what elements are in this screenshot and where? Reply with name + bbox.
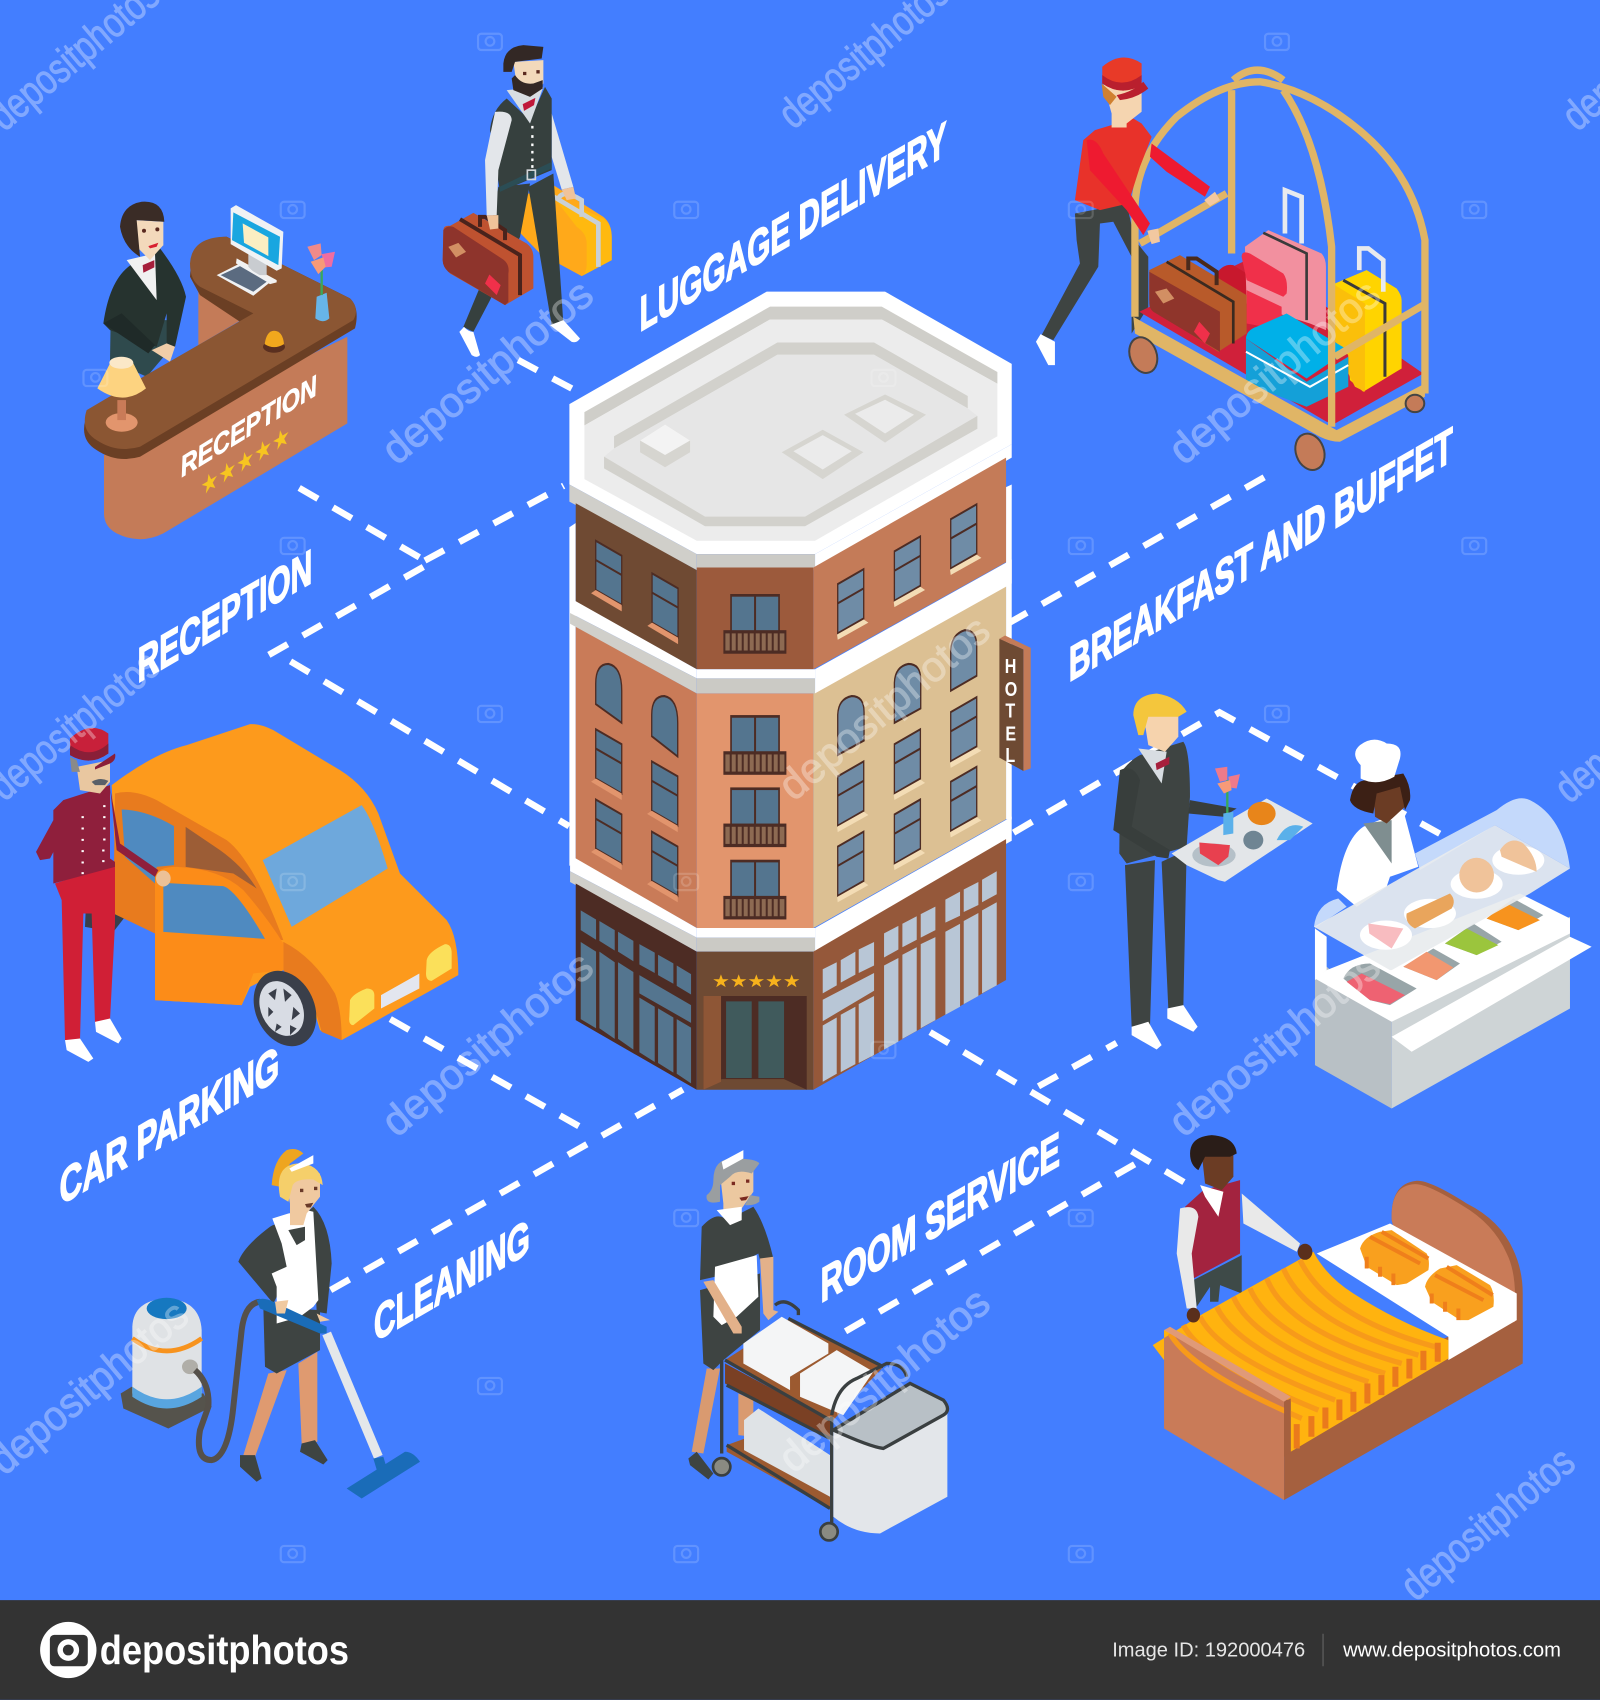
chef shirt [1363, 820, 1392, 863]
chef body [1337, 810, 1418, 907]
hotel sign: E [1005, 722, 1016, 745]
arms [703, 1257, 778, 1333]
trousers [1193, 1255, 1242, 1307]
bed foot board edge [1164, 1327, 1291, 1402]
mattress [1317, 1223, 1517, 1360]
image id: Image ID: 192000476 [1112, 1639, 1305, 1662]
cake [1199, 842, 1230, 865]
hair [1102, 83, 1117, 105]
vacuum grip [257, 1299, 327, 1333]
rear wheel [85, 883, 125, 932]
cornice bands [570, 559, 1012, 952]
footer bar [0, 1600, 1600, 1700]
label: breakfast and buffet: BREAKFAST AND BUFFET [1069, 417, 1453, 693]
chef hair [1350, 773, 1410, 813]
door glass [163, 883, 265, 939]
desk sign text: RECEPTION [179, 369, 319, 483]
computer [217, 205, 283, 296]
tray [1172, 798, 1313, 882]
head [1202, 1150, 1233, 1190]
roof [569, 292, 1012, 570]
footer logo text: depositphotos [100, 1627, 349, 1673]
vacuum blue rim [132, 1387, 202, 1408]
desk [198, 292, 247, 345]
buttons [83, 805, 104, 874]
wheels [1124, 333, 1424, 474]
hair and beard [503, 45, 543, 97]
waiter head [1143, 713, 1178, 752]
belt [499, 162, 552, 192]
shoes [240, 1440, 328, 1482]
counter shelf [1392, 937, 1592, 1052]
porter jacket [1075, 118, 1152, 210]
hotel sign: T [1005, 699, 1015, 722]
waiter arms [1113, 768, 1237, 858]
label: cleaning: CLEANING [374, 1209, 530, 1353]
lamp [97, 357, 146, 432]
lights and plate [349, 944, 452, 1025]
counter top [1315, 893, 1570, 1022]
vest [490, 87, 552, 192]
ground floor: ★★★★★ [712, 971, 800, 991]
dress neck [288, 1227, 305, 1245]
side trim [569, 484, 1012, 866]
cake plate [1192, 843, 1236, 867]
headband [722, 1150, 743, 1169]
footer logo mark [40, 1622, 96, 1678]
cap band and visor [1102, 75, 1148, 100]
illustration: maid with vacuum cleaner [121, 1149, 420, 1498]
bag lid [833, 1383, 948, 1448]
hotel sign [999, 636, 1031, 771]
waiter shoes [1132, 1005, 1198, 1049]
apron [713, 1255, 758, 1325]
taco [1500, 840, 1537, 872]
car body [112, 724, 458, 1040]
site url: www.depositphotos.com [1342, 1639, 1561, 1662]
waiter legs [1125, 850, 1187, 1027]
illustration: waiter with tray and chef with buffet [1113, 693, 1592, 1108]
hair [707, 1158, 759, 1205]
dashed connector lines [269, 360, 1442, 1331]
skirt [263, 1307, 320, 1373]
hotel sign: L [1005, 743, 1015, 766]
cart frame front and base [1133, 82, 1425, 442]
illustration: maid with towel trolley [688, 1150, 948, 1540]
front wheel [242, 960, 328, 1057]
near arm [485, 112, 512, 215]
shirt collar [1200, 1185, 1223, 1217]
red suitcase [443, 213, 533, 305]
interior window [186, 827, 257, 888]
blanket hem stripes [1297, 1343, 1438, 1448]
counter right face [1392, 917, 1570, 1108]
legs [463, 183, 530, 332]
buttons and buckle [529, 126, 536, 168]
teapot [1248, 802, 1276, 825]
head [1103, 80, 1142, 127]
guard curve [1415, 798, 1570, 870]
open door [155, 867, 283, 1005]
head [77, 760, 110, 793]
hotel sign: H [1005, 654, 1016, 677]
blanket [1153, 1252, 1448, 1452]
hotel building [569, 292, 1031, 1090]
top floor [576, 458, 1006, 669]
eyes [523, 70, 540, 75]
shirt and bow tie [507, 87, 543, 123]
yellow suitcase [1335, 248, 1402, 392]
watermarks: depositphotos [372, 942, 602, 1145]
label: luggage delivery: LUGGAGE DELIVERY [640, 112, 947, 343]
dress top [238, 1207, 332, 1313]
burger [1459, 858, 1494, 892]
vacuum body [132, 1298, 202, 1405]
counter left face [1315, 927, 1392, 1108]
bed right side [1284, 1320, 1523, 1500]
face details [732, 1179, 749, 1201]
mustache [92, 779, 108, 785]
red platform [1139, 257, 1423, 423]
cup [1243, 831, 1263, 849]
porter arms [1087, 140, 1210, 235]
skirt [700, 1273, 760, 1370]
waiter jacket [1119, 742, 1190, 863]
label: reception: RECEPTION [138, 539, 312, 694]
cart frame back [1232, 70, 1283, 253]
middle floors [576, 581, 1006, 928]
pans [1343, 898, 1543, 1005]
hands [275, 1300, 330, 1322]
head [513, 60, 543, 95]
bun [272, 1149, 303, 1187]
hand [156, 870, 171, 886]
laundry bag [833, 1413, 947, 1533]
illustration: car with doorman [36, 724, 458, 1062]
cap [70, 728, 108, 761]
flowers [1215, 767, 1240, 835]
chef head [1373, 780, 1405, 823]
doorman shoes [65, 1018, 122, 1062]
head [287, 1173, 320, 1225]
second towels [800, 1350, 873, 1415]
bed left side [1164, 1330, 1284, 1500]
lower towels [744, 1408, 830, 1497]
windshield [263, 805, 388, 927]
porter far side and legs [1036, 203, 1148, 365]
rear window [122, 809, 174, 883]
brown suitcase [1149, 255, 1247, 352]
doorman jacket [36, 785, 158, 883]
illustration: bed with bellhop [1153, 1135, 1523, 1500]
collar [717, 1207, 742, 1225]
watermarks: depositphotos [769, 606, 999, 809]
vest [1185, 1180, 1240, 1278]
watermarks: depositphotos [1159, 942, 1389, 1145]
vacuum opening [147, 1298, 187, 1319]
shoes [459, 327, 480, 357]
blue suitcase [1246, 313, 1348, 407]
waiter shirt [1138, 748, 1167, 783]
doorman trousers [55, 863, 115, 1040]
cake slice [1368, 923, 1403, 948]
yellow suitcase [521, 185, 612, 276]
bow tie [1156, 757, 1169, 770]
arms [1177, 1193, 1300, 1308]
ground floor [576, 839, 1006, 1090]
back bag [1217, 265, 1247, 323]
legs [692, 1368, 753, 1453]
vacuum orange band [132, 1338, 202, 1351]
pillow two [1425, 1265, 1494, 1320]
cap band and visor [70, 743, 115, 769]
pink suitcase [1242, 190, 1326, 330]
hair [1190, 1135, 1237, 1170]
receptionist [103, 202, 186, 377]
trolley top shelf [725, 1318, 883, 1423]
hands [1187, 1244, 1312, 1322]
label: room service: ROOM SERVICE [821, 1122, 1060, 1314]
pillow one [1360, 1230, 1429, 1285]
hose [195, 1302, 260, 1460]
hair [279, 1163, 323, 1202]
hotel sign: O [1005, 677, 1017, 700]
face details [300, 1187, 317, 1207]
cap [1102, 58, 1142, 91]
wheels [713, 1458, 838, 1540]
mop head [347, 1452, 420, 1498]
blanket stripes [1170, 1260, 1435, 1418]
headboard [1392, 1181, 1523, 1353]
plates [1360, 845, 1544, 950]
trolley frame [722, 1302, 907, 1527]
legs [243, 1352, 317, 1457]
far arm [552, 113, 573, 189]
illustration: luggage cart with porter [1036, 58, 1425, 474]
label: car parking: CAR PARKING [60, 1036, 279, 1217]
bed foot inner [1284, 1398, 1291, 1457]
top towels [743, 1317, 828, 1390]
napkin holder [1277, 825, 1303, 840]
guard left end [1314, 898, 1347, 927]
mop handle [327, 1333, 378, 1457]
headband [289, 1155, 313, 1172]
watermarks: depositphotos [1159, 270, 1389, 473]
trolley front rail [725, 1363, 830, 1437]
trolley lower shelf [727, 1438, 830, 1508]
connector [182, 1359, 198, 1374]
watermarks: depositphotos [769, 1278, 999, 1481]
hot dog [1406, 893, 1454, 928]
bodice [700, 1207, 773, 1280]
counter post [1315, 928, 1327, 980]
waiter hair [1133, 693, 1187, 735]
guard glass shelf [1314, 825, 1570, 970]
car side [113, 792, 342, 1040]
watermarks: depositphotos [372, 270, 602, 473]
hair [70, 757, 80, 772]
illustration: bellboy with suitcases [443, 45, 612, 357]
illustration: reception desk with receptionist [84, 202, 357, 539]
flowers in vase [307, 243, 335, 321]
chef hat [1355, 740, 1401, 782]
divider [1322, 1634, 1324, 1666]
hands [1147, 192, 1220, 244]
shoe [688, 1452, 713, 1479]
apron [272, 1210, 318, 1323]
vacuum base [121, 1387, 212, 1428]
bell [263, 331, 285, 353]
head [720, 1167, 753, 1213]
desk stars: ★★★★★ [199, 421, 292, 501]
